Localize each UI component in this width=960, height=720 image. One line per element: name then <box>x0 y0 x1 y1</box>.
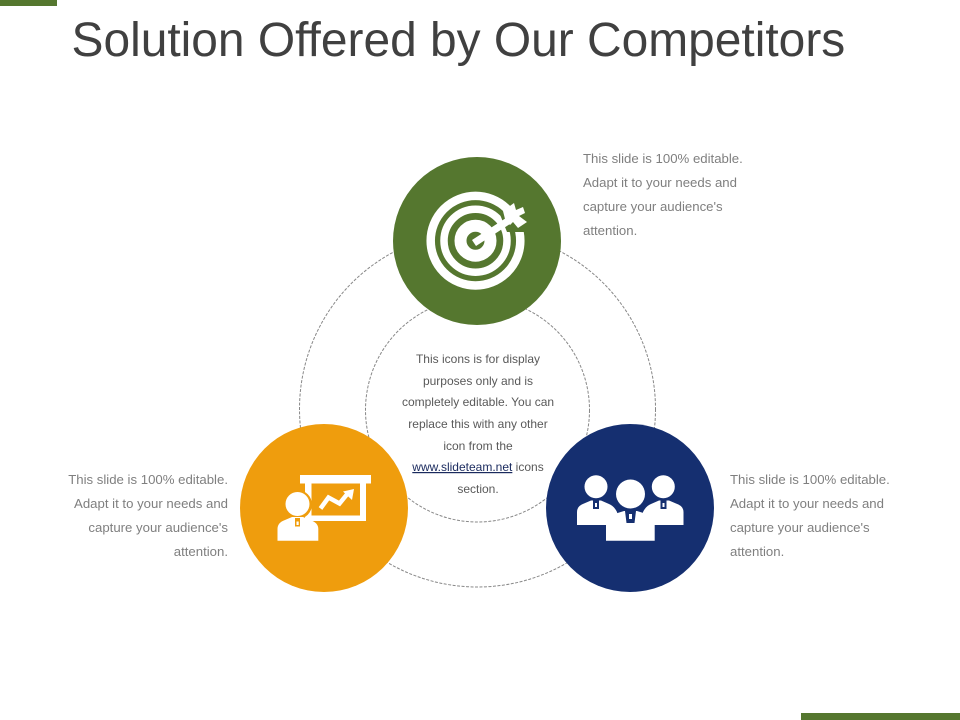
center text block: www.slideteam.net icons <box>411 460 544 474</box>
accent bar: bottom right <box>801 713 960 720</box>
text block: bottom left: capture your audience's <box>88 520 228 535</box>
text block: top right: capture your audience's <box>583 199 723 214</box>
text block: bottom left: Adapt it to your needs and <box>74 496 228 511</box>
center text block: section. <box>457 482 499 496</box>
center text block: icon from the <box>443 439 513 453</box>
text block: bottom left: attention. <box>174 544 228 559</box>
center text block: replace this with any other <box>408 417 548 431</box>
center text block: purposes only and is <box>423 374 533 388</box>
text block: bottom right: capture your audience's <box>730 520 870 535</box>
text block: bottom right: attention. <box>730 544 784 559</box>
title: Solution Offered by Our Competitors <box>72 14 845 67</box>
text block: top right: This slide is 100% editable. <box>583 151 743 166</box>
icon: presenter with chart board <box>278 475 371 541</box>
center text block: completely editable. You can <box>402 395 554 409</box>
text block: bottom right <box>730 472 890 559</box>
center text block: This icons is for display <box>416 352 540 366</box>
text block: top right: attention. <box>583 223 637 238</box>
text block: bottom right: Adapt it to your needs and <box>730 496 884 511</box>
text block: bottom left: This slide is 100% editable. <box>68 472 228 487</box>
inner dashed ring <box>366 298 590 522</box>
text block: top right: Adapt it to your needs and <box>583 175 737 190</box>
icon: target with arrow <box>431 196 530 286</box>
accent bar: top left <box>0 0 57 6</box>
text block: top right <box>583 151 743 238</box>
node: presenter (orange) <box>240 424 408 592</box>
node: target (green) <box>393 157 561 325</box>
center text block <box>402 352 554 496</box>
outer dashed ring <box>300 231 656 587</box>
icon: three people <box>577 475 684 541</box>
node: team (navy) <box>546 424 714 592</box>
text block: bottom right: This slide is 100% editable. <box>730 472 890 487</box>
text block: bottom left <box>68 472 228 559</box>
